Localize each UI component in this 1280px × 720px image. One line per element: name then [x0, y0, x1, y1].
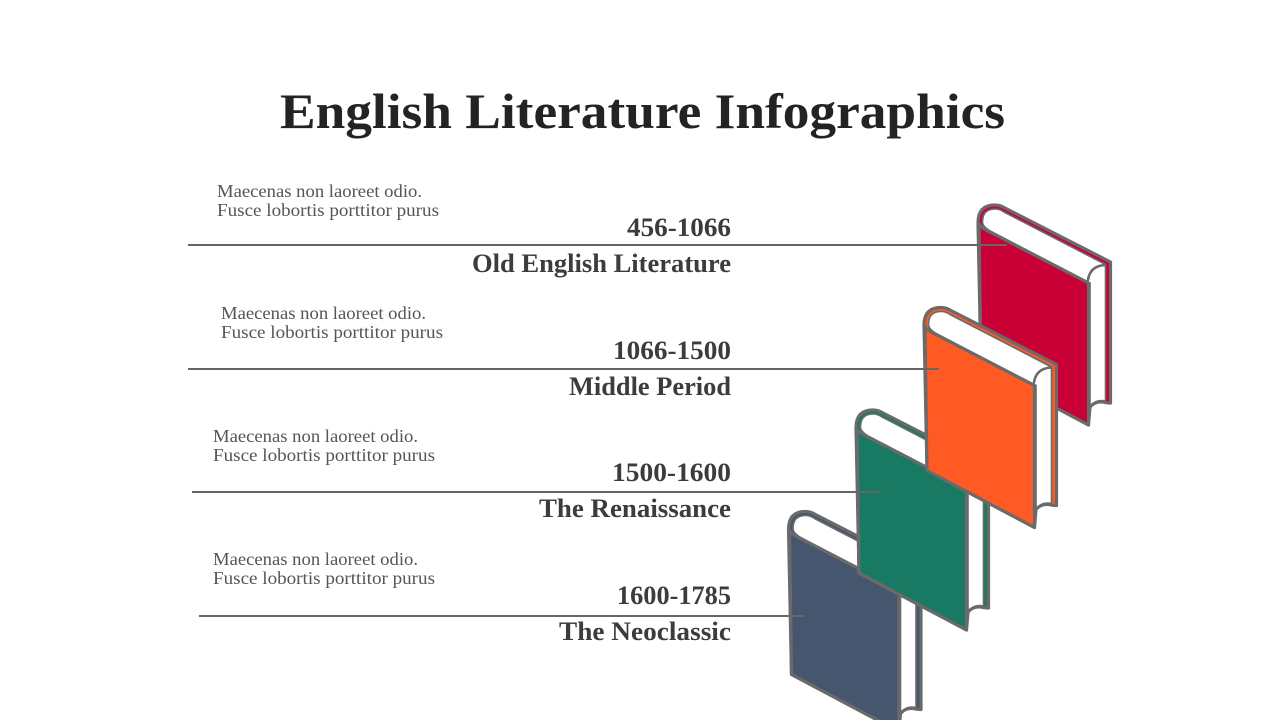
description 1: Maecenas non laoreet odio. [217, 181, 422, 201]
description 4: Fusce lobortis porttitor purus [213, 568, 435, 588]
leader line 4 [199, 615, 804, 617]
year 1: 456-1066 [627, 213, 731, 242]
icon: red book [978, 205, 1110, 425]
description 2: Fusce lobortis porttitor purus [221, 322, 443, 342]
name 1: Old English Literature [472, 249, 731, 278]
description 3: Fusce lobortis porttitor purus [213, 445, 435, 465]
entry: Middle Period [188, 303, 939, 401]
name 2: Middle Period [569, 372, 732, 401]
entry: Old English Literature [188, 181, 1007, 278]
year 3: 1500-1600 [612, 458, 731, 487]
icon: navy book [788, 512, 921, 720]
leader line 1 [188, 244, 1007, 246]
description 1: Fusce lobortis porttitor purus [217, 200, 439, 220]
name 4: The Neoclassic [559, 617, 731, 646]
year 2: 1066-1500 [613, 336, 731, 365]
icon: green book [856, 410, 988, 630]
year 4: 1600-1785 [617, 581, 731, 610]
entry: The Renaissance [192, 426, 881, 523]
description 4: Maecenas non laoreet odio. [213, 549, 418, 569]
description 2: Maecenas non laoreet odio. [221, 303, 426, 323]
title: English Literature Infographics [280, 83, 1005, 139]
description 3: Maecenas non laoreet odio. [213, 426, 418, 446]
leader line 2 [188, 368, 939, 370]
name 3: The Renaissance [539, 494, 731, 523]
leader line 3 [192, 491, 881, 493]
icon: orange book [924, 308, 1056, 528]
entry: The Neoclassic [199, 549, 804, 646]
